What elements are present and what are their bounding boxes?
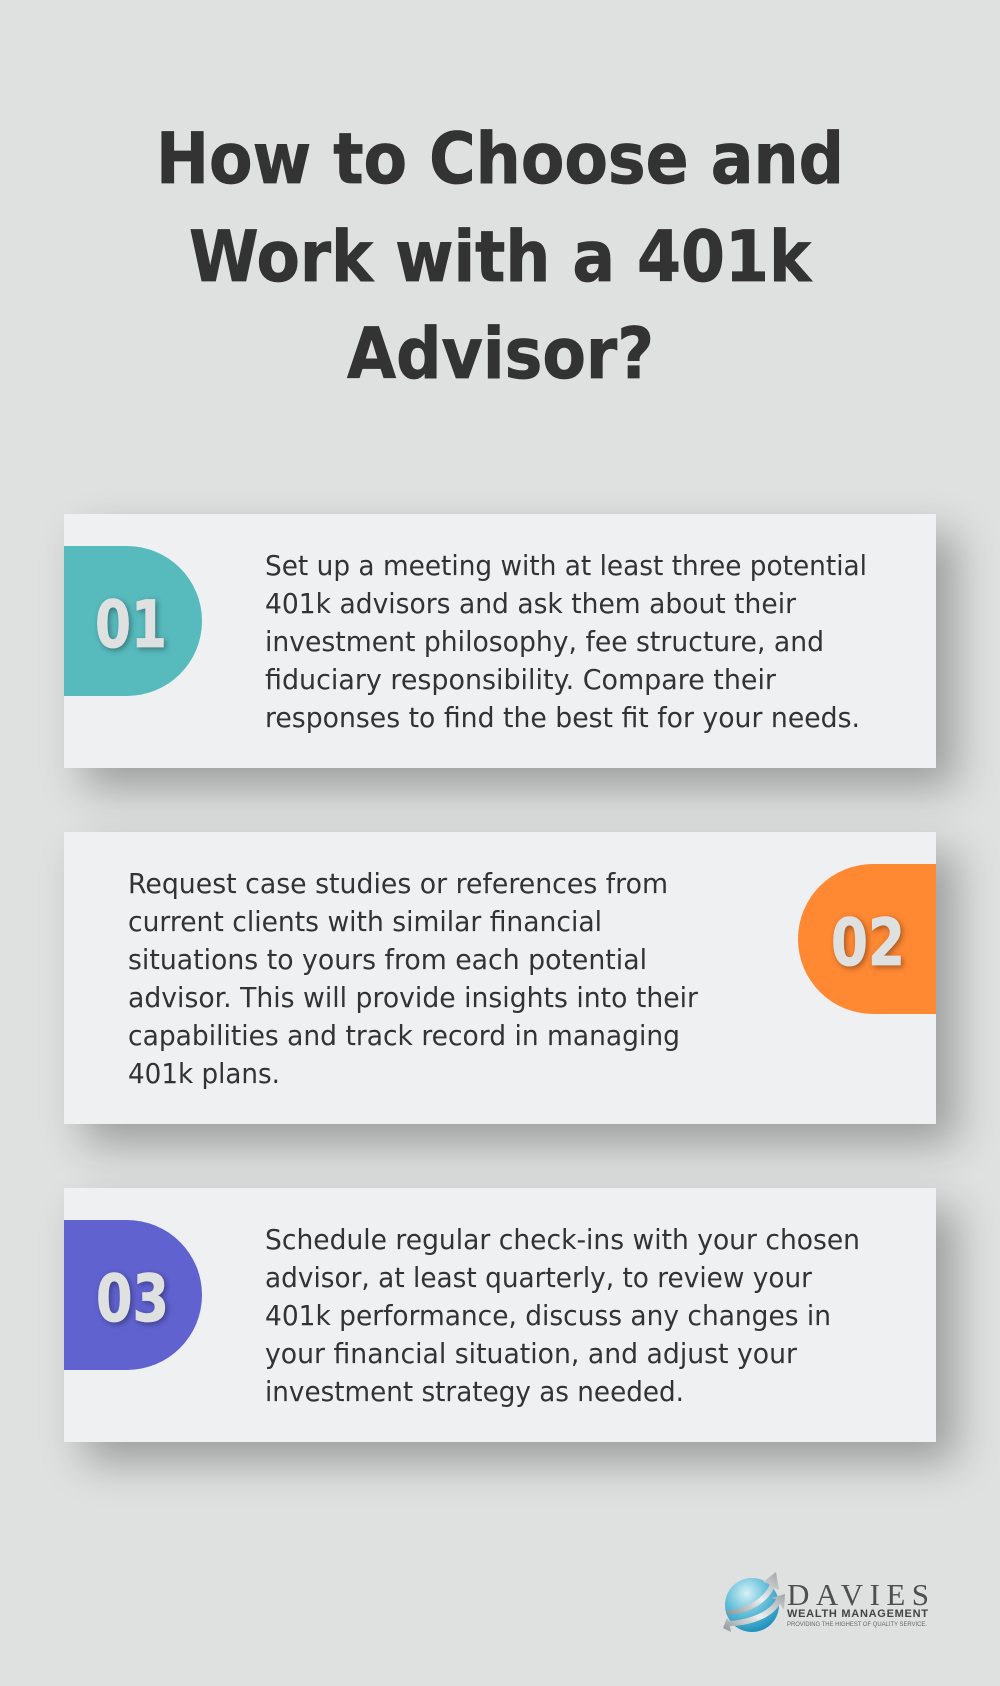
text: step 03 description: advisor, at least quarterly, to review your [265,1262,813,1294]
text: step 03 description: Schedule regular check-ins with your chosen [265,1224,860,1256]
logo wordmark [787,1577,929,1628]
text: step 01 description: responses to find the best fit for your needs. [265,702,860,734]
logo wordmark: DAVIES [787,1577,929,1612]
text: step 03 description [265,1224,860,1408]
logo wordmark: PROVIDING THE HIGHEST OF QUALITY SERVICE. [787,1621,927,1628]
logo: Davies Wealth Management [723,1572,929,1632]
text: step 02 description: current clients with similar financial [128,906,602,938]
text: step 02 description: Request case studies or references from [128,868,668,900]
panel: step 01 [64,514,936,768]
badge: 01 [64,546,202,696]
badge: 03: 03 [96,1262,169,1337]
text: step 01 description: 401k advisors and ask them about their [265,588,797,620]
badge: 02 [798,864,936,1014]
text: step 02 description: advisor. This will provide insights into their [128,982,699,1014]
text: step 01 description [265,550,867,734]
title: Work with a 401k [189,216,812,298]
badge: 01: 01 [95,588,167,663]
text: step 01 description: Set up a meeting with at least three potential [265,550,867,582]
badge: 02: 02 [831,906,905,981]
logo wordmark: WEALTH MANAGEMENT [787,1608,928,1620]
text: step 03 description: 401k performance, discuss any changes in [265,1300,831,1332]
text: step 02 description: capabilities and track record in managing [128,1020,680,1052]
panel: step 03 [64,1188,936,1442]
title [156,118,844,395]
text: step 03 description: investment strategy as needed. [265,1376,684,1408]
text: step 02 description: situations to yours from each potential [128,944,647,976]
text: step 02 description [128,868,699,1090]
icon: globe with swooshes [723,1572,785,1632]
text: step 02 description: 401k plans. [128,1058,280,1090]
title: How to Choose and [156,118,844,200]
panel: step 02 [64,832,936,1124]
text: step 01 description: fiduciary responsibility. Compare their [265,664,777,696]
badge: 03 [64,1220,202,1370]
text: step 03 description: your financial situation, and adjust your [265,1338,798,1370]
text: step 01 description: investment philosophy, fee structure, and [265,626,824,658]
title: Advisor? [347,313,654,395]
